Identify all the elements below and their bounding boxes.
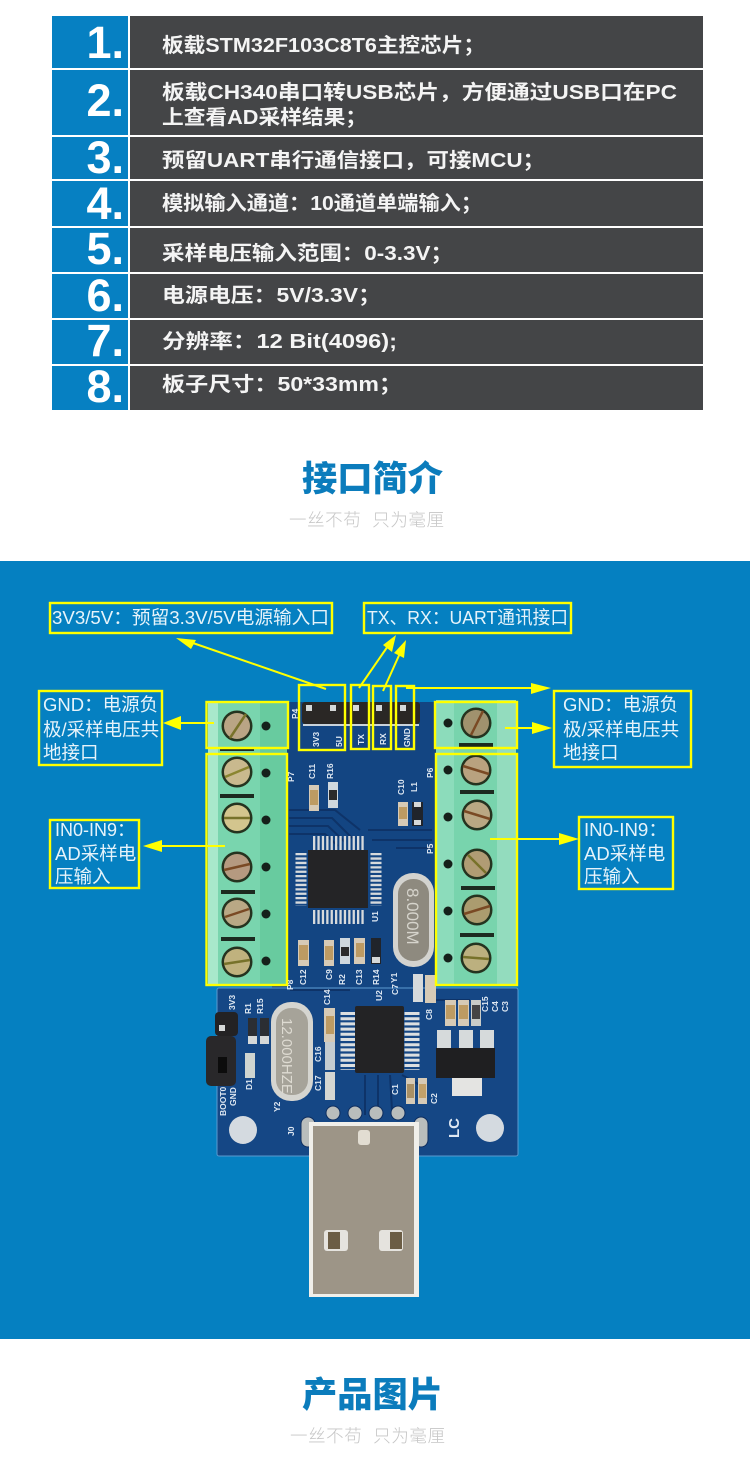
SMD parts lower [245, 1000, 481, 1104]
header silk labels: 5U [334, 736, 344, 747]
row 6 [52, 270, 703, 321]
lower silk labels: BOOT0 [218, 1086, 228, 1116]
traces [289, 810, 470, 1115]
crystal: 8MHz [393, 873, 434, 967]
lower silk labels: C4 [490, 1001, 500, 1012]
lower silk labels: C15 [480, 996, 490, 1012]
callout: IN0-IN9 right: 压输入 [584, 866, 640, 887]
arrow: GND pin to right callout [406, 683, 551, 694]
header silk labels: L1 [409, 782, 419, 792]
callout: GND left: 地接口 [43, 742, 99, 763]
arrow: right top terminal [505, 722, 552, 734]
row 2: 板载CH340串口转USB芯片，方便通过USB口在PC [162, 80, 677, 104]
lower silk labels: R1 [243, 1003, 253, 1014]
callout: 3V3/5V [50, 603, 332, 633]
USB connector [309, 1122, 419, 1297]
lower silk labels: 3V3 [227, 995, 237, 1010]
callout: GND left: 极/采样电压共 [43, 719, 159, 740]
callout: GND left: GND：电源负 [43, 694, 158, 715]
lower silk labels: LC [446, 1118, 463, 1138]
USB solder pads [301, 1106, 428, 1147]
callout: 3V3/5V: 3V3/5V：预留3.3V/5V电源输入口 [52, 607, 329, 628]
callout: GND right [554, 691, 691, 767]
header silk labels: P4 [290, 708, 300, 719]
chip: CH340 [348, 1006, 412, 1073]
lower silk labels: C8 [424, 1009, 434, 1020]
pin header [302, 702, 420, 726]
header silk labels: P7 [286, 771, 296, 782]
header silk labels: R2 [337, 974, 347, 985]
header silk labels: GND [402, 728, 412, 747]
row 5: 5. [86, 223, 124, 274]
arrow: RX [383, 640, 406, 691]
subheading: product photo: 一丝不苟 只为毫厘 [290, 1426, 445, 1446]
header silk labels: 3V3 [311, 732, 321, 747]
row 7: 分辨率：12 Bit(4096); [162, 330, 397, 353]
lower silk labels: C14 [322, 989, 332, 1005]
row 2: 上查看AD采样结果； [162, 106, 367, 129]
photo: PCB board [206, 702, 518, 1297]
crystal: 8MHz: 8.000M [403, 888, 422, 945]
lower silk labels: R15 [255, 998, 265, 1014]
lower board [217, 988, 518, 1156]
header silk labels: C7 [390, 984, 400, 995]
callout: TX RX [364, 603, 571, 633]
header silk labels: P8 [285, 979, 295, 990]
header silk labels: U1 [370, 911, 380, 922]
callout: IN0-IN9 left: 压输入 [55, 866, 111, 887]
callout: GND left [39, 691, 162, 765]
row 6: 电源电压：5V/3.3V； [162, 284, 381, 307]
row 7 [52, 315, 703, 366]
screws right [460, 708, 492, 974]
row 3 [52, 132, 703, 183]
row 6: 6. [86, 270, 124, 321]
callout: GND right: GND：电源负 [563, 694, 678, 715]
lower silk labels: U2 [374, 990, 384, 1001]
subheading: interface intro: 一丝不苟 只为毫厘 [289, 510, 444, 530]
callout: IN0-IN9 right [579, 817, 673, 889]
header silk labels: R14 [371, 969, 381, 985]
arrow: left IN terminals [143, 840, 225, 852]
wire holes left [262, 722, 270, 966]
row 1: 板载STM32F103C8T6主控芯片； [162, 34, 485, 57]
row 3: 3. [86, 132, 124, 183]
wire holes right [444, 718, 452, 962]
lower silk labels: Y2 [272, 1101, 282, 1112]
row 8: 板子尺寸：50*33mm； [162, 373, 402, 396]
jumper [206, 1012, 238, 1086]
callout: IN0-IN9 left [50, 819, 139, 888]
row 4: 模拟输入通道：10通道单端输入； [162, 192, 482, 215]
header silk labels: R16 [325, 763, 335, 779]
row 5 [52, 223, 703, 274]
callout: IN0-IN9 right: AD采样电 [584, 843, 665, 864]
header silk labels: C13 [354, 969, 364, 985]
callout: GND right: 地接口 [563, 742, 619, 763]
row 1: 1. [86, 17, 124, 68]
callout: IN0-IN9 right: IN0-IN9： [584, 819, 667, 840]
lower silk labels: D1 [244, 1079, 254, 1090]
terminal block right [436, 700, 516, 985]
screws left [222, 710, 252, 978]
header silk labels: TX [356, 734, 366, 745]
chip: STM32 QFP [301, 843, 376, 917]
lower silk labels: C16 [313, 1046, 323, 1062]
header silk labels: C10 [396, 779, 406, 795]
header silk labels: RX [378, 733, 388, 745]
callout: GND right: 极/采样电压共 [563, 719, 679, 740]
row 1 [52, 16, 703, 68]
callout: IN0-IN9 left: AD采样电 [55, 843, 136, 864]
header silk labels [285, 708, 435, 995]
row 8: 8. [86, 361, 124, 412]
panel: blue product diagram [0, 561, 750, 1339]
mounting holes [229, 1114, 504, 1144]
feature list [52, 16, 703, 412]
row 8 [52, 361, 703, 412]
upper board [272, 702, 436, 992]
arrow: to 3V3/5V callout [176, 638, 326, 689]
row 4: 4. [86, 178, 124, 229]
header silk labels: C9 [324, 969, 334, 980]
heading: product photo: 产品图片 [302, 1376, 443, 1415]
SMD parts upper [298, 782, 436, 1003]
heading: interface intro: 接口简介 [302, 460, 443, 499]
row 7: 7. [86, 315, 124, 366]
lower silk labels: C17 [313, 1075, 323, 1091]
header silk labels: P5 [425, 843, 435, 854]
crystal: 12MHz [271, 1002, 313, 1101]
lower silk labels [218, 989, 510, 1138]
header silk labels: C12 [298, 969, 308, 985]
terminal block left [208, 702, 287, 985]
lower silk labels: C3 [500, 1001, 510, 1012]
callout: IN0-IN9 left: IN0-IN9： [55, 819, 135, 840]
arrow: TX [359, 635, 396, 688]
lower silk labels: GND [228, 1087, 238, 1106]
header silk labels: P6 [425, 767, 435, 778]
callout: TX RX: TX、RX：UART通讯接口 [367, 607, 568, 628]
arrow: right IN terminals [490, 833, 579, 845]
voltage regulator [436, 1030, 495, 1096]
row 4 [52, 178, 703, 229]
arrow: left top terminal [163, 716, 214, 730]
header silk labels: Y1 [389, 972, 399, 983]
crystal: 12MHz: 12.000HZE [278, 1018, 295, 1094]
lower silk labels: C1 [390, 1084, 400, 1095]
lower silk labels: C2 [429, 1093, 439, 1104]
row 3: 预留UART串行通信接口，可接MCU； [162, 148, 545, 172]
row 2 [52, 70, 703, 135]
lower silk labels: J0 [286, 1126, 296, 1136]
row 5: 采样电压输入范围：0-3.3V； [162, 242, 453, 265]
header silk labels: C11 [307, 764, 317, 779]
row 2: 2. [86, 75, 124, 126]
highlight boxes [206, 685, 517, 985]
